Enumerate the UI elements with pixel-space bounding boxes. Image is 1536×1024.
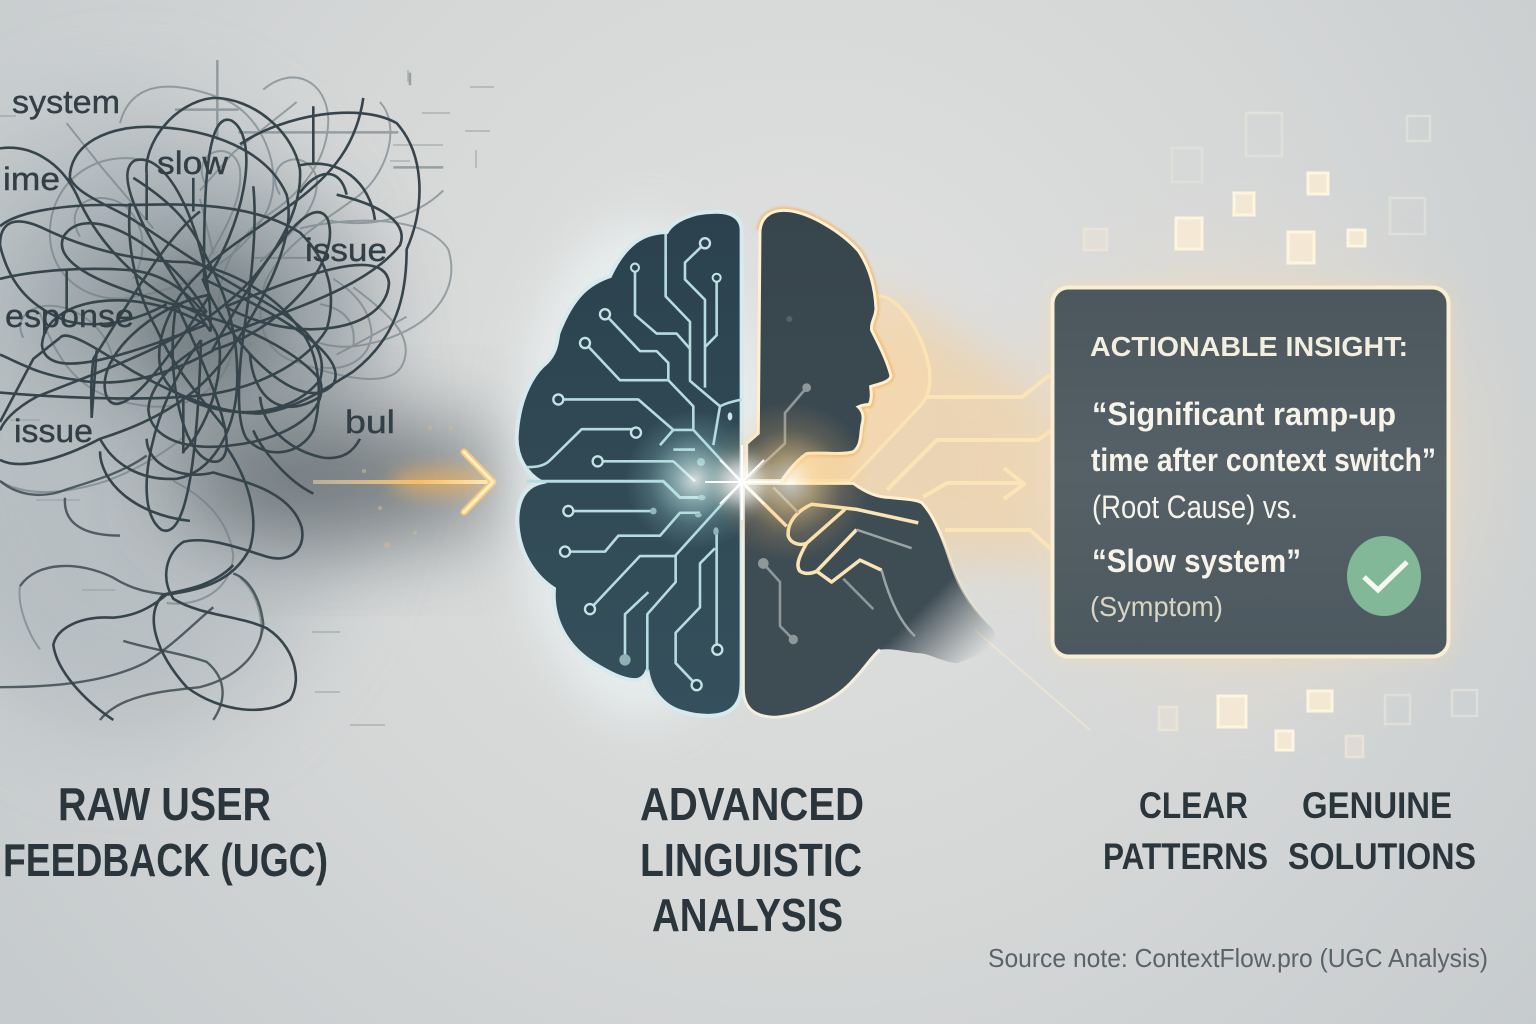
heading: genuine solutions: SOLUTIONS [1288,836,1476,877]
arrow: feedback to analysis [313,426,493,548]
scattered words: system [12,84,120,120]
head and hand: human half [743,210,995,717]
heading: advanced linguistic analysis: ADVANCED [640,778,864,830]
hand silhouette [743,484,995,717]
heading: raw user feedback [3,778,328,886]
faint dashes [0,70,494,725]
rosette loops [62,223,207,313]
glow: warm halo behind head and connectors [515,220,1470,720]
heading: clear patterns: CLEAR [1139,785,1248,826]
scattered words: esponse [5,298,134,334]
heading: clear patterns: PATTERNS [1103,836,1268,877]
back of head lobe [783,296,930,481]
insight quote: time after context switch” [1091,442,1436,478]
circuit traces [527,234,742,685]
brain: left circuit half [517,212,742,716]
insight quote: “Significant ramp-up [1092,396,1396,432]
hand outline [743,483,990,626]
scribble light layer [0,60,451,649]
warm glow around head [760,210,891,481]
heading: advanced linguistic analysis [640,778,864,941]
centre spark [625,402,870,562]
floating squares [1084,113,1477,757]
heading: genuine solutions: GENUINE [1302,785,1452,826]
scattered words: slow [157,145,229,181]
symptom label: (Symptom) [1090,591,1223,622]
insight heading: ACTIONABLE INSIGHT: [1090,331,1408,362]
left brain body [517,212,742,716]
heading: advanced linguistic analysis: ANALYSIS [652,889,843,941]
panel: raw feedback scribble [0,60,510,740]
icon: check badge [1347,536,1421,616]
fingers [743,483,918,636]
smudge behind scribble [0,100,510,740]
heading: raw user feedback: FEEDBACK (UGC) [3,834,328,886]
circuit nodes [553,238,722,690]
scattered words: issue [305,232,387,268]
solid nodes [619,412,732,666]
scattered words [3,84,395,449]
insight quote: “Slow system” [1092,543,1301,579]
insight quote: (Root Cause) vs. [1092,489,1298,525]
scattered words: issue [14,413,93,449]
scattered words: ime [3,161,60,197]
scribble dark layer [0,98,419,720]
panel: actionable insight box [1052,287,1449,657]
heading: advanced linguistic analysis: LINGUISTIC [640,834,862,886]
insight quote [1091,396,1436,579]
faded traces in head and hand [743,388,873,640]
heading: clear patterns [1103,785,1268,877]
heading: raw user feedback: RAW USER [58,778,271,830]
source note: Source note: ContextFlow.pro (UGC Analysis) [988,943,1488,973]
scattered words: bul [345,404,395,440]
head silhouette [747,210,891,481]
connector lines to insight box [887,375,1090,730]
heading: genuine solutions [1288,785,1476,877]
